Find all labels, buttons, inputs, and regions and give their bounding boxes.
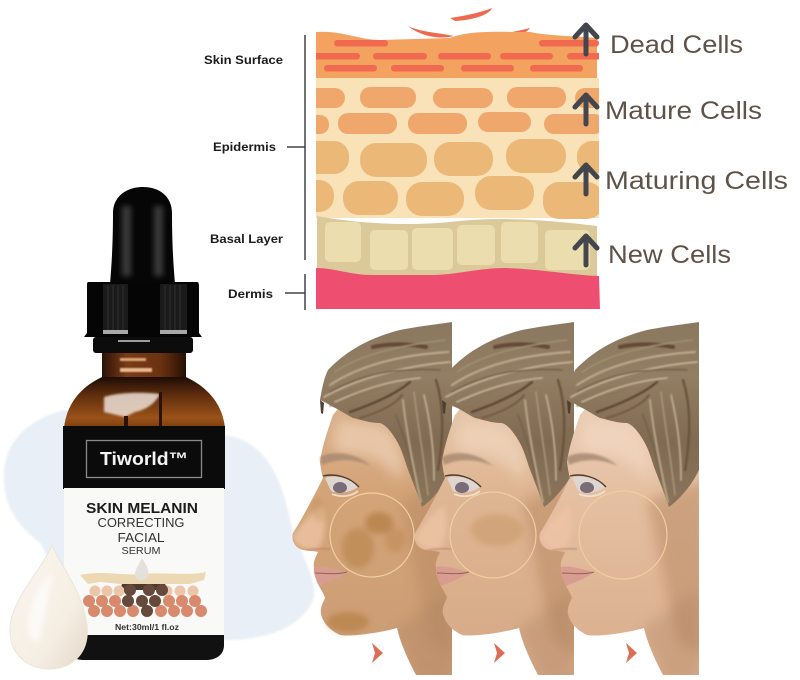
- skin layer: basal band: [317, 216, 597, 276]
- bottle: amber glass: [64, 377, 225, 428]
- panel: face after treatment: [539, 322, 707, 680]
- cell stage labels: [605, 31, 788, 269]
- brackets: epidermis and dermis: [285, 35, 305, 310]
- cell stage labels: Maturing Cells: [605, 167, 788, 195]
- product name text: [86, 500, 198, 632]
- arrow: [372, 643, 383, 663]
- bottle: dropper bulb: [110, 187, 175, 284]
- product name text: SERUM: [122, 545, 160, 557]
- layer labels: [204, 53, 283, 301]
- bottle: ribbed cap: [84, 282, 202, 337]
- cell stage labels: New Cells: [608, 241, 731, 269]
- arrow: mature cells: [575, 95, 597, 124]
- cell stage labels: Dead Cells: [610, 31, 743, 59]
- bottle: black base: [66, 630, 224, 660]
- bottle: amber neck: [102, 353, 186, 380]
- skin layer: dead flakes: [408, 8, 530, 40]
- layer labels: Skin Surface: [204, 53, 283, 67]
- skin layer: dead cells: [310, 40, 607, 72]
- bottle: black label band: [63, 426, 225, 489]
- cell stage labels: Mature Cells: [605, 97, 762, 125]
- melanin patches: [312, 498, 405, 632]
- brand box: Tiworld™: [100, 449, 188, 469]
- product name text: CORRECTING: [98, 515, 184, 530]
- brand box: [86, 440, 202, 478]
- bottle: collar: [93, 337, 193, 353]
- panel: face during treatment: [414, 322, 582, 680]
- arrow: [626, 643, 637, 663]
- treatment circle: [579, 491, 667, 579]
- skin layer: new cells: [325, 222, 590, 270]
- arrow: maturing cells: [575, 165, 597, 194]
- bottle: white label: [64, 488, 224, 635]
- icon: serum drop: [10, 545, 87, 669]
- skin layer: cream epidermis: [316, 78, 599, 218]
- product name text: FACIAL: [118, 530, 164, 545]
- treatment circle: [450, 492, 536, 578]
- layer labels: Basal Layer: [210, 232, 283, 246]
- fading patches: [471, 514, 523, 546]
- layer labels: Epidermis: [213, 140, 276, 154]
- panel: serum bottle: [63, 187, 225, 660]
- panel: face before treatment: [292, 322, 460, 680]
- chart: skin layer diagram: [316, 8, 600, 309]
- product name text: Net:30ml/1 fl.oz: [115, 622, 179, 632]
- skin layer: dermis: [316, 268, 600, 309]
- arrow: dead cells: [575, 25, 597, 54]
- skin layer: surface band: [316, 32, 597, 78]
- arrow: [494, 643, 505, 663]
- skin layer: mature cells: [316, 87, 599, 134]
- skin layer: maturing cells: [316, 139, 599, 219]
- layer labels: Dermis: [228, 287, 273, 301]
- label illustration: skin cross-section: [80, 558, 207, 617]
- treatment circle: [330, 493, 414, 577]
- background: blue cream smear: [4, 410, 314, 640]
- arrow: new cells: [575, 236, 597, 265]
- product name text: SKIN MELANIN: [86, 500, 198, 517]
